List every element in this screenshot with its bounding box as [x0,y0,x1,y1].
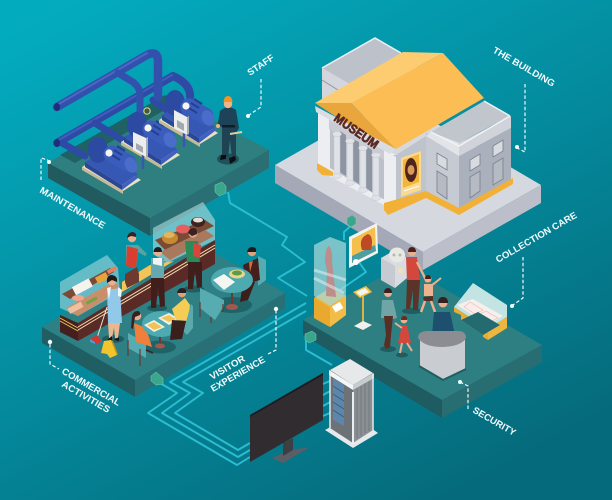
chair right [258,256,266,286]
man yellow [170,288,193,340]
label: commercial activities: ACTIVITIES [60,378,112,415]
control panels [133,110,189,169]
connector chips [151,182,356,385]
worker [216,96,242,164]
label: security: SECURITY [471,404,519,438]
platform: maintenance [48,95,269,236]
pump 3 [159,90,218,147]
label: commercial activities: COMMERCIAL [60,365,123,408]
building base [275,98,541,270]
yellow plinth [384,178,513,215]
label: the building [491,44,557,152]
building [275,38,541,270]
food counter [60,202,215,341]
label: maintenance: MAINTENANCE [38,184,108,231]
pipes [54,53,190,156]
chair left [128,333,146,366]
waitress [126,232,147,268]
man in red [402,247,427,314]
server [325,359,378,448]
pastry case left [60,255,120,316]
wet floor sign [101,340,118,358]
child arm raised [421,275,441,312]
poster [401,151,421,197]
woman orange [131,311,153,353]
label: visitor experience: EXPERIENCE [208,354,267,394]
valve [144,108,150,114]
label: commercial activities [48,340,123,415]
label: staff [245,52,276,118]
roof [315,52,484,154]
cleaner with mop [90,275,124,344]
label: collection care [494,209,579,308]
sign: MUSEUM: MUSEUM [331,111,381,152]
man in teal [380,288,397,352]
customer with backpack [184,228,204,292]
table one group [128,288,193,366]
girl [395,316,412,358]
pumps [82,90,218,194]
side wall with poster [384,136,426,205]
guard and desk [418,297,466,381]
cake case right [153,202,215,263]
platform: commercial [42,240,285,397]
display case [454,283,507,340]
man dark [240,247,260,302]
cash register [125,267,139,288]
lectern [353,286,372,330]
label: visitor experience [208,307,278,394]
label: collection care: COLLECTION CARE [494,209,579,265]
customer at counter [147,247,167,312]
label: staff: STAFF [245,52,276,78]
portico facade [317,112,396,205]
monitor [250,373,323,463]
glass case with statue [314,237,346,327]
circuit lines [148,192,366,465]
painting [349,223,378,268]
pump 2 [121,112,180,169]
platform: collection and security [303,265,542,418]
label: visitor experience: VISITOR [208,353,247,382]
label: maintenance [38,158,108,231]
windows [437,140,503,199]
table two group [200,247,266,323]
back wing [322,38,420,110]
empty chair [200,288,224,323]
right wing [426,101,511,210]
label: the building: THE BUILDING [491,44,557,89]
label: security [458,380,519,438]
skull on pedestal [381,248,407,288]
columns [332,132,380,200]
pump 1 [82,137,141,194]
